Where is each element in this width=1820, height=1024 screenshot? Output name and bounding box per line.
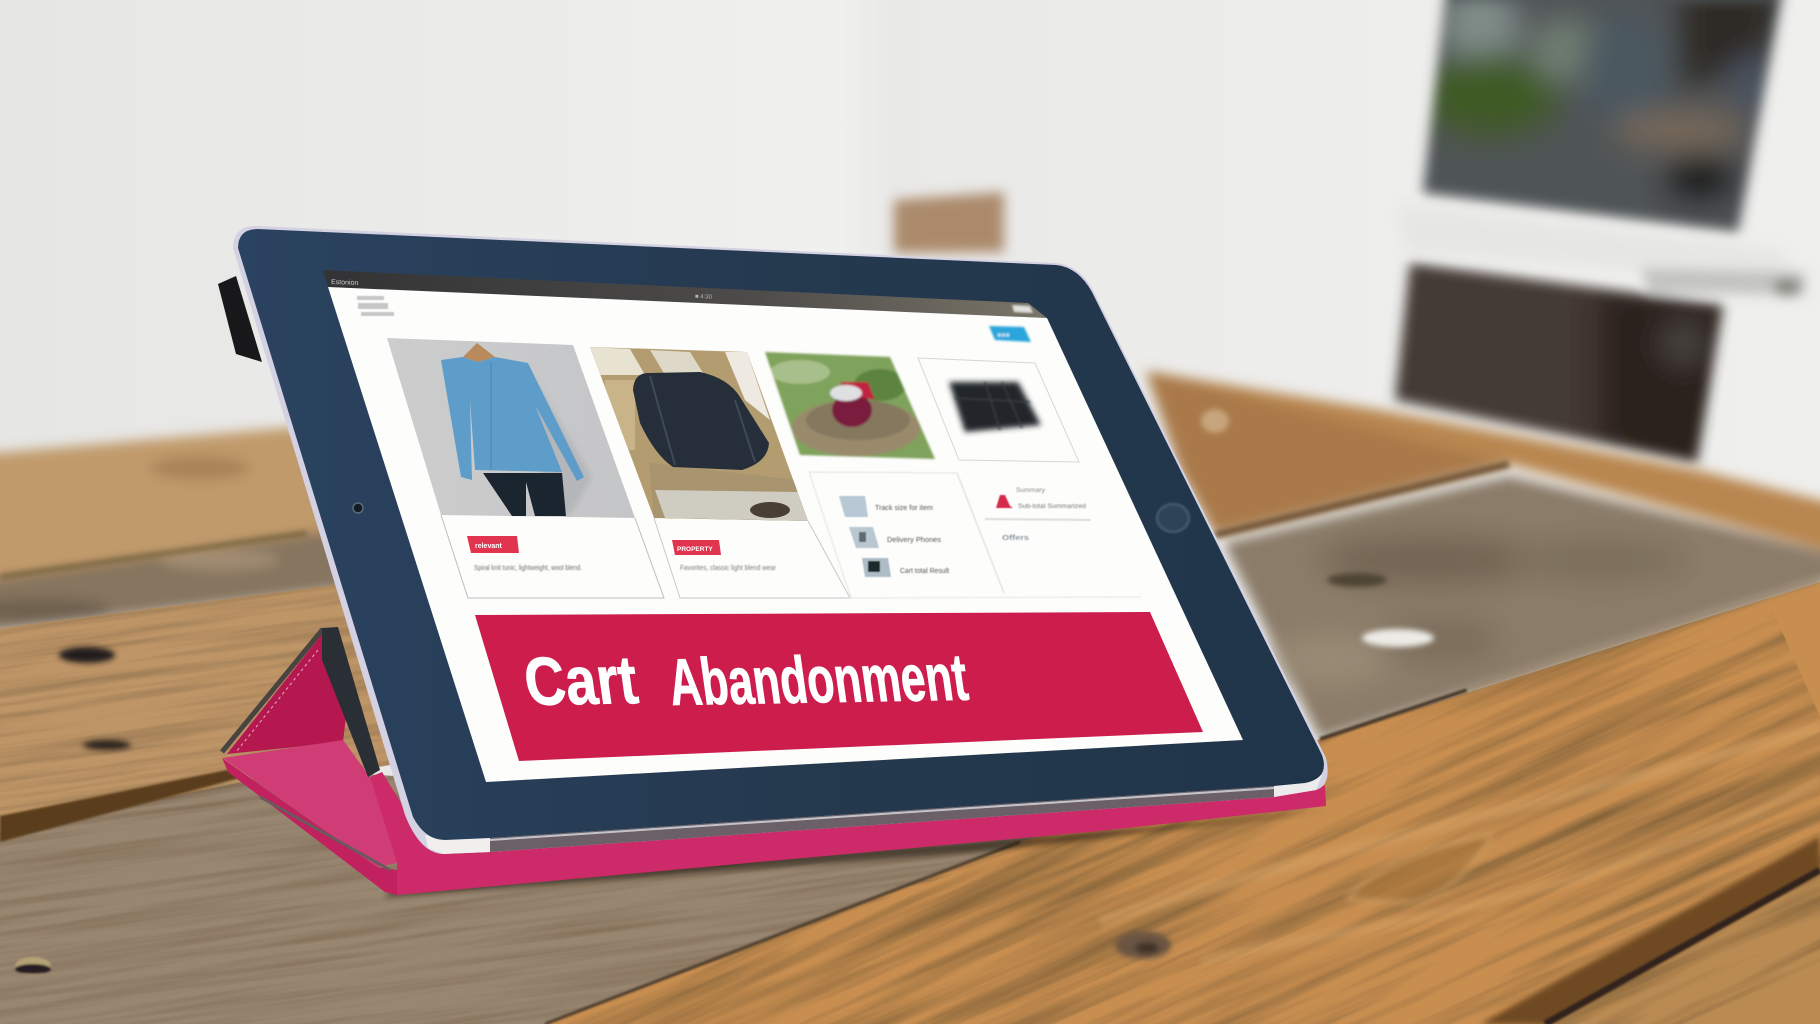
case lower skirt (222, 758, 397, 895)
case floor panel (223, 740, 397, 867)
screen status bar: Estonion (331, 279, 359, 287)
silver corners (1274, 775, 1322, 797)
summary panel: Offers (1002, 535, 1029, 542)
card 1 outline (441, 515, 664, 598)
screen status bar (323, 270, 1047, 318)
case back flap (227, 634, 348, 754)
card 2 caption: Favorites, classic light blend wear (680, 563, 777, 572)
list item 2: Delivery Phones (887, 537, 942, 544)
list item 3: Cart total Result (900, 568, 949, 575)
leggings (483, 473, 566, 516)
case shadow (385, 810, 1330, 897)
card 2 tag: PROPERTY (677, 546, 713, 553)
dark inner pocket (322, 627, 380, 777)
tablet strap button (218, 276, 262, 362)
screen (328, 287, 1243, 782)
wood grain texture (0, 574, 1820, 1024)
list item 2 (849, 527, 942, 548)
card 1 tag: relevant (475, 543, 503, 550)
card 1 tag (467, 536, 519, 553)
card 1 caption: Spiral knit tunic, lightweight, wool blend. (474, 563, 582, 572)
hanger neck (463, 343, 495, 362)
sweater (441, 357, 584, 481)
silver frame (233, 226, 1328, 854)
table far planks, out of focus (0, 371, 1820, 739)
case base strip (370, 772, 1326, 895)
blue badge (989, 326, 1031, 342)
product image 4: black bag (918, 358, 1079, 462)
title: Abandonment (664, 641, 972, 720)
blue badge: ●●● (997, 332, 1010, 339)
wood flame figure (1100, 728, 1820, 1024)
summary panel: Sub-total Summarized (1018, 503, 1086, 510)
case fuzzy edge (222, 629, 323, 752)
table near planks (0, 574, 1820, 1024)
card 2 outline (654, 518, 850, 598)
screen status bar: ■ 4:30 (695, 294, 713, 301)
tablet (233, 226, 1328, 854)
card 2 tag (672, 540, 721, 555)
list item 1: Track size for item (875, 505, 933, 512)
sweater shadow (532, 375, 592, 516)
options list panel (809, 472, 1004, 598)
product card 1: blue sweater (387, 338, 664, 598)
title (520, 641, 972, 720)
product image 3: bowl on wood (765, 352, 935, 459)
bezel (238, 229, 1324, 840)
list item 1 (839, 496, 933, 517)
summary panel (851, 473, 1141, 598)
hamburger menu (357, 296, 394, 316)
window and shelf background (894, 0, 1805, 480)
wall background (0, 0, 1820, 620)
title: Cart (520, 642, 642, 720)
list item 3 (862, 558, 949, 577)
home button (1157, 504, 1189, 532)
red banner (475, 612, 1203, 761)
pink case (222, 627, 1326, 895)
product card 2: dark jacket (590, 347, 850, 598)
summary panel: Summary (1016, 487, 1046, 494)
camera (353, 503, 363, 513)
plank gaps and knots (0, 409, 1820, 1024)
